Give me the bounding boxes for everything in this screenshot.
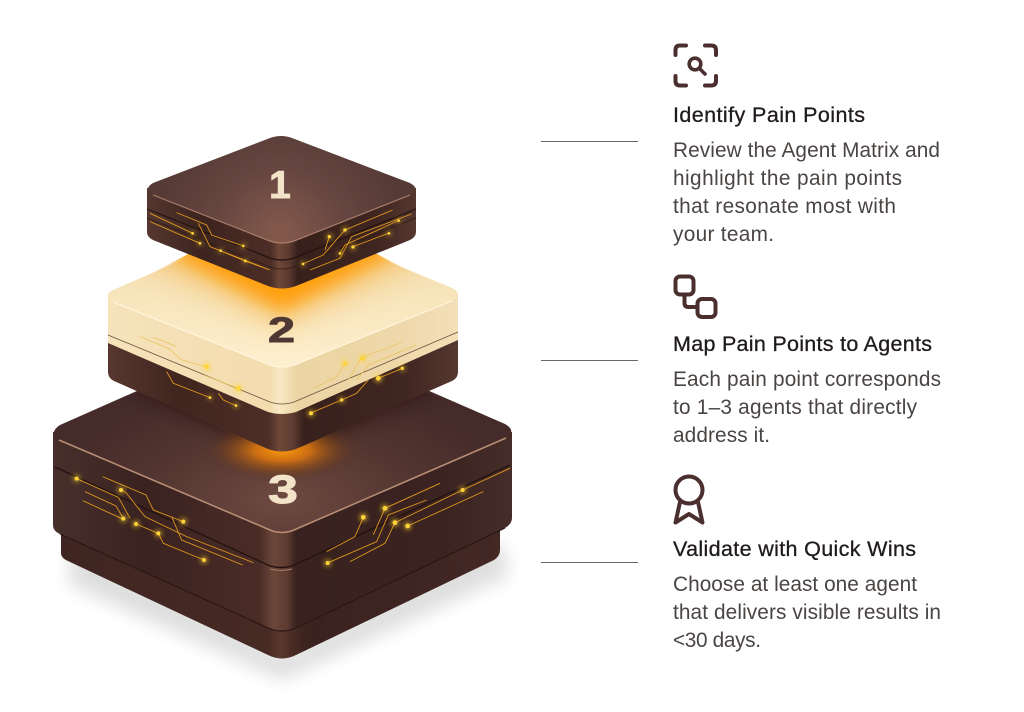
body: step 2: Each pain point corresponds: [673, 368, 941, 391]
body: step 3: that delivers visible results in: [673, 601, 941, 624]
heading: identify pain points: Identify Pain Points: [673, 103, 865, 127]
body: step 1: that resonate most with: [673, 195, 896, 218]
glow under layer 1: [146, 254, 419, 338]
layer 3: bottom block: [53, 391, 512, 658]
body: step 3: Choose at least one agent: [673, 573, 917, 596]
layer 2: cream block: [108, 254, 458, 452]
heading: map pain points: Map Pain Points to Agents: [673, 332, 932, 356]
body: step 1: Review the Agent Matrix and: [673, 139, 940, 162]
number 2: 2: [268, 311, 295, 350]
step 1 text: [673, 103, 940, 246]
body: step 1: your team.: [673, 223, 774, 246]
circuit: layer 3 right: [326, 468, 510, 565]
top face: [148, 136, 416, 243]
body: step 2: to 1–3 agents that directly: [673, 396, 918, 419]
shadow under layer 2: [136, 392, 428, 438]
leader line 2: [541, 360, 638, 362]
body: step 2: [673, 368, 941, 447]
ground shadow: [70, 540, 510, 680]
body: step 1: highlight the pain points: [673, 167, 902, 190]
number 1: 1: [269, 164, 291, 207]
icon: award ribbon: [676, 476, 702, 522]
cream sides: [108, 293, 458, 414]
top face: [108, 220, 458, 367]
sides: [147, 188, 416, 288]
body: step 3: <30 days.: [673, 629, 761, 652]
body: step 3: [673, 573, 941, 652]
icon: linked squares: [676, 276, 716, 317]
layer 1: top block: [147, 136, 416, 288]
block sides: [53, 432, 512, 631]
icon: search in scan frame: [676, 46, 716, 86]
top face: [54, 330, 511, 532]
step 2 text: [673, 332, 941, 447]
circuit: layer 2: [140, 337, 417, 415]
step 3 text: [673, 537, 941, 652]
leader line 3: [541, 562, 638, 564]
lower brown sides: [108, 330, 458, 452]
circuit: layer 3 left: [75, 477, 253, 565]
glow under layer 2: [218, 432, 346, 476]
base plinth: [61, 525, 500, 658]
leader line 1: [541, 140, 638, 142]
circuit: layer 1: [150, 210, 412, 270]
body: step 1: [673, 139, 940, 246]
body: step 2: address it.: [673, 424, 770, 447]
heading: validate with quick wins: Validate with Quick Wins: [673, 537, 916, 561]
number 3: 3: [268, 468, 298, 512]
